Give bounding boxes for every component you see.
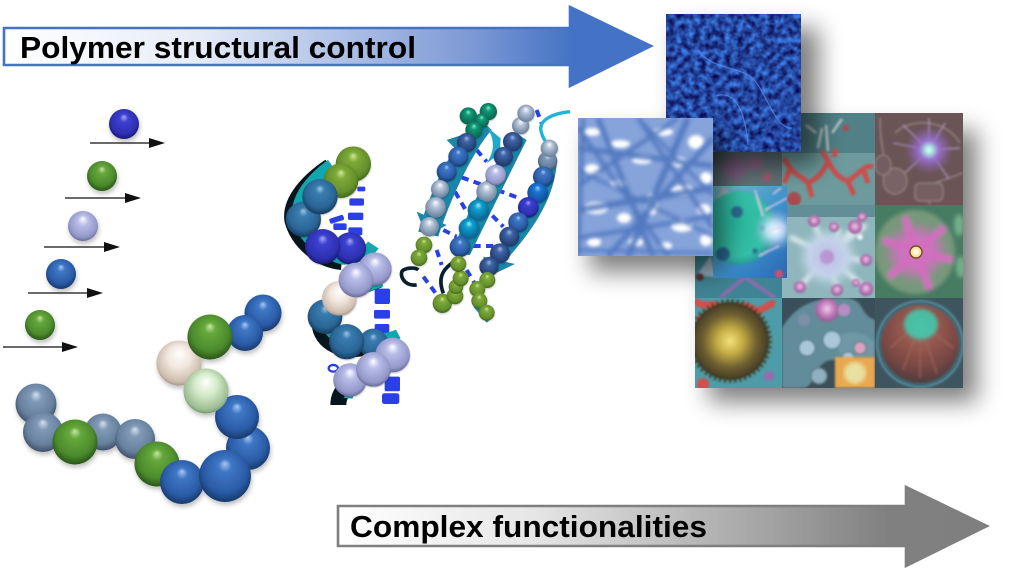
monomer: blue [46,259,76,289]
tile: brown cell with purple star [875,113,963,205]
tile: gold spiky sphere [695,298,782,388]
tile: row 1 left [713,152,782,186]
arrow: polymer structural control [4,7,651,86]
arrow 2 [65,193,141,203]
beta strands ribbon [417,122,557,323]
arrow: complex functionalities [338,487,987,566]
helix residues [286,146,410,397]
monomer: indigo [109,109,139,139]
tile: bubbles with orange square [782,298,875,388]
tile: red teal radial sphere [875,298,963,388]
alpha helix structure [286,146,410,405]
polymer chain [16,294,282,504]
helix ribbon [292,165,398,405]
arrow 3 [44,242,120,252]
heading: polymer structural control: Polymer structural control [20,31,416,65]
arrow 1 [90,138,165,148]
monomer: lavender [68,211,98,241]
image mosaic: complex functional structures [691,113,977,402]
arrow 5 [3,342,78,352]
tile: pink balls [782,205,875,298]
tile: row 2 left [695,256,782,298]
monomer sequence with arrows [3,109,165,352]
monomer: green 2 [25,310,55,340]
tile: coral branch [782,113,875,205]
monomer: green [87,161,117,191]
hydrogen bond dashes [329,187,400,404]
sheet hydrogen bonds [423,110,542,297]
heading: complex functionalities: Complex functionalities [350,510,707,544]
image: teal cell with glowing spikes [713,186,787,278]
beta residues [411,103,558,321]
image: dark blue fibrous micrograph [666,14,819,166]
tile: green with pink star [875,205,963,298]
image: pale blue nanofibre micrograph [578,118,725,272]
arrow 4 [28,288,103,298]
beta sheet structure [401,103,570,323]
